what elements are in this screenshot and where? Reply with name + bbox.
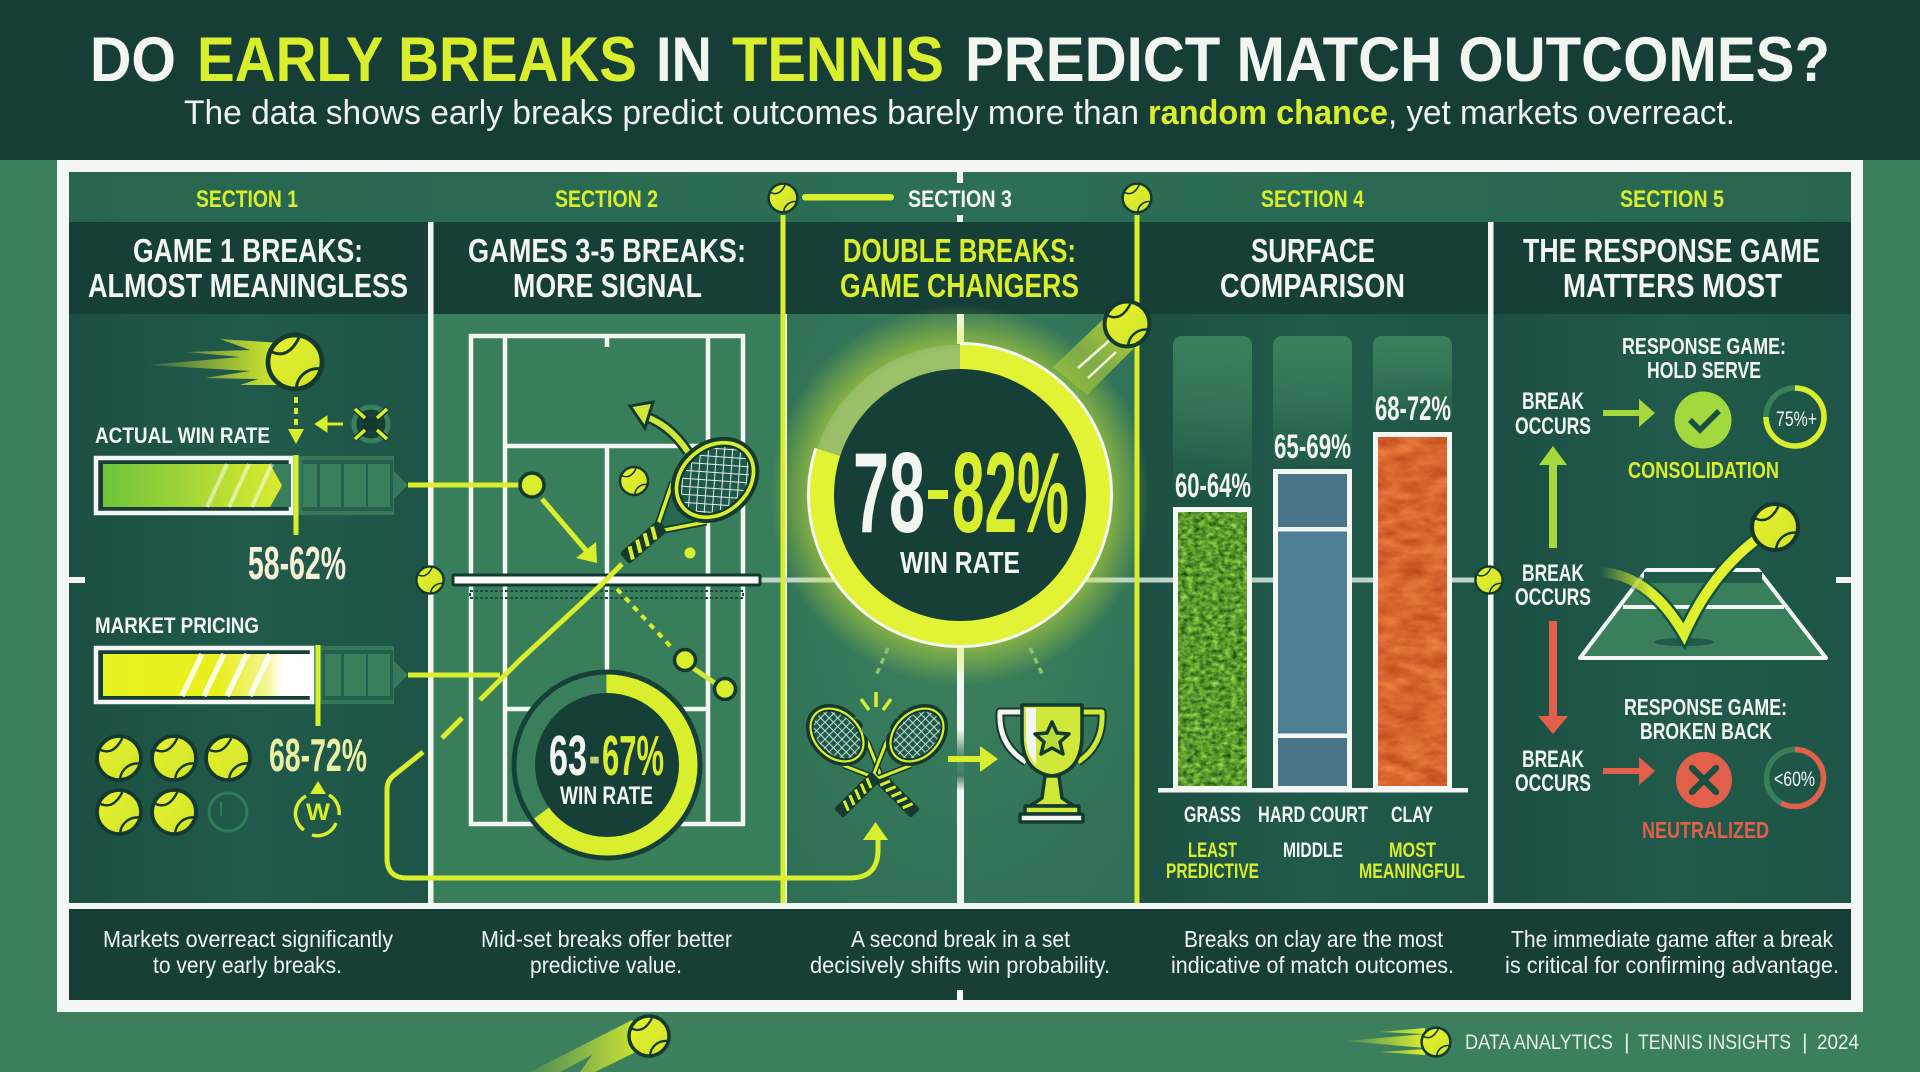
icon: racket — [600, 422, 774, 587]
icon: broken crossed rackets — [796, 692, 958, 831]
title: DO — [90, 25, 176, 95]
bar: actual win rate — [96, 455, 408, 535]
section labels: SECTION 5 — [1620, 186, 1724, 213]
label: break occurs bottom — [1515, 746, 1591, 797]
predictive labels: MEANINGFUL — [1359, 860, 1465, 883]
subtitle: The data shows early breaks predict outcomes barely more than — [184, 94, 1139, 132]
icon: footer ball — [1346, 1028, 1450, 1056]
label: break occurs top: BREAK — [1522, 388, 1584, 415]
label: broken back: RESPONSE GAME: — [1624, 694, 1787, 720]
dotted path — [617, 589, 736, 700]
bar values: 60-64% — [1175, 467, 1251, 505]
section headings: DOUBLE BREAKS: — [843, 233, 1076, 270]
section 3: double breaks — [770, 302, 1150, 831]
takeaway 1: to very early breaks. — [153, 952, 342, 978]
icon: flying ball — [1078, 302, 1149, 378]
takeaway 1 — [103, 926, 393, 978]
ball trail — [1053, 311, 1142, 395]
takeaway 5: is critical for confirming advantage. — [1505, 952, 1839, 978]
value: market pricing: 68-72% — [269, 729, 367, 781]
predictive labels: MOST — [1389, 839, 1436, 862]
takeaway 1: Markets overreact significantly — [103, 926, 393, 952]
section 2: games 3-5 breaks — [387, 336, 888, 878]
footer text: | — [1802, 1030, 1808, 1054]
icon: cross — [1676, 752, 1732, 808]
donut: 78-82% win rate: 78 — [853, 430, 925, 557]
section label strip — [69, 172, 1851, 222]
section 4: surface comparison — [1158, 336, 1468, 883]
bar values: 65-69% — [1274, 428, 1351, 466]
donut: 63-67% win rate: 63 — [549, 724, 587, 788]
divider ball: section 4-5 — [1475, 566, 1503, 594]
takeaway 3 — [810, 926, 1110, 978]
subtitle — [184, 94, 1735, 132]
ghost bar tracks — [1173, 336, 1452, 500]
takeaway 5: The immediate game after a break — [1511, 926, 1833, 952]
label: break occurs bottom: OCCURS — [1515, 770, 1591, 797]
title — [90, 25, 1830, 95]
bar: grass — [1176, 510, 1250, 789]
predictive labels: LEAST — [1188, 839, 1237, 862]
takeaway band — [69, 909, 1851, 1000]
section headings: THE RESPONSE GAME — [1523, 233, 1820, 270]
donut: 63-67% win rate: - — [589, 724, 600, 788]
arrowhead to rackets — [863, 822, 888, 840]
icon: crossed target — [354, 407, 388, 441]
section headings: MORE SIGNAL — [513, 268, 702, 305]
surface labels: CLAY — [1391, 802, 1433, 827]
predictive labels — [1166, 839, 1465, 883]
section 5: response game — [1515, 333, 1826, 843]
takeaway 2: Mid-set breaks offer better — [481, 926, 732, 952]
label: hold serve: HOLD SERVE — [1647, 357, 1761, 383]
label: broken back — [1624, 694, 1787, 744]
connector: actual to court — [408, 473, 597, 563]
icon: speeding ball — [147, 335, 322, 389]
icon: check — [1674, 392, 1732, 448]
donut: 78-82% win rate: WIN RATE — [900, 546, 1020, 580]
title: EARLY BREAKS — [197, 25, 637, 95]
ring: under 60%: <60% — [1774, 768, 1815, 791]
takeaway 4: Breaks on clay are the most — [1184, 926, 1444, 952]
section headings: SURFACE — [1251, 233, 1375, 270]
donut: 63-67% win rate: 67% — [602, 724, 664, 788]
bar values: 68-72% — [1375, 390, 1451, 428]
label: actual win rate: ACTUAL WIN RATE — [95, 423, 270, 448]
label: break occurs middle: BREAK — [1522, 560, 1584, 587]
predictive labels: PREDICTIVE — [1166, 860, 1259, 883]
net — [453, 575, 760, 598]
panel: section 1 background — [69, 314, 428, 903]
arrow to trophy — [948, 746, 998, 772]
icon: W badge: W — [306, 799, 330, 826]
section 1: game 1 breaks — [95, 335, 408, 836]
label: break occurs middle: OCCURS — [1515, 584, 1591, 611]
label: break occurs top — [1515, 388, 1591, 440]
donut: 78-82% win rate: 82% — [952, 430, 1069, 557]
tennis court — [471, 336, 743, 824]
label: break occurs middle — [1515, 560, 1591, 611]
arrow: down — [1538, 621, 1568, 734]
footer text: TENNIS INSIGHTS — [1638, 1030, 1791, 1054]
section headings: ALMOST MEANINGLESS — [88, 268, 408, 305]
section headings: GAME 1 BREAKS: — [133, 233, 363, 270]
section labels: SECTION 4 — [1261, 186, 1365, 213]
value: actual win rate: 58-62% — [248, 537, 346, 589]
donut: 63-67% win rate: WIN RATE — [560, 782, 653, 810]
takeaway 3: A second break in a set — [851, 926, 1071, 952]
panel: section 2 background — [433, 314, 783, 903]
label: neutralized: NEUTRALIZED — [1642, 817, 1769, 843]
heading band — [69, 222, 1851, 314]
yellow section 3 frame — [769, 184, 1151, 903]
takeaway 2 — [481, 926, 732, 978]
takeaway 4: indicative of match outcomes. — [1171, 952, 1454, 978]
takeaways — [103, 926, 1839, 978]
icon: small ball — [620, 467, 648, 495]
connector: market to section 3 — [387, 564, 878, 878]
title: PREDICT MATCH OUTCOMES? — [965, 25, 1830, 95]
section labels: SECTION 2 — [555, 186, 658, 213]
section labels: SECTION 3 — [908, 186, 1012, 213]
icon: trophy — [1000, 705, 1102, 822]
panel: section 4 background — [1139, 314, 1488, 903]
icon: W badge — [295, 781, 339, 836]
section headings: MATTERS MOST — [1563, 268, 1782, 305]
label: hold serve — [1622, 333, 1786, 383]
takeaway 3: decisively shifts win probability. — [810, 952, 1110, 978]
ring: 75%+: 75%+ — [1776, 408, 1817, 431]
arrow to marker — [317, 418, 343, 430]
glow — [770, 305, 1150, 685]
takeaway 4 — [1171, 926, 1454, 978]
ring: 75%+ — [1766, 388, 1824, 446]
predictive labels: MIDDLE — [1283, 839, 1343, 862]
title: IN — [656, 25, 712, 95]
white frame — [57, 160, 1863, 1012]
footer — [1346, 1028, 1859, 1056]
panel: section 5 background — [1493, 314, 1851, 903]
section headings — [88, 233, 1820, 305]
header band — [0, 0, 1920, 160]
label: hold serve: RESPONSE GAME: — [1622, 333, 1786, 359]
bar: hard court — [1276, 472, 1350, 788]
title: TENNIS — [732, 25, 944, 95]
dot — [684, 548, 696, 558]
dashed links — [875, 648, 1044, 678]
footer text — [1465, 1030, 1859, 1054]
arrow: to consolidation — [1603, 399, 1655, 427]
icon: ball count — [97, 736, 250, 834]
bar: market pricing — [96, 645, 408, 726]
section headings: COMPARISON — [1220, 268, 1405, 305]
label: break occurs top: OCCURS — [1515, 413, 1591, 440]
subtitle: , yet markets overreact. — [1388, 94, 1735, 132]
takeaway 5 — [1505, 926, 1839, 978]
surface labels: GRASS — [1184, 802, 1241, 827]
divider ball: section 1-2 — [416, 566, 444, 594]
arrow: up — [1539, 446, 1567, 548]
donut: 63-67% win rate — [514, 672, 700, 858]
ring: under 60% — [1766, 750, 1824, 806]
label: market pricing: MARKET PRICING — [95, 613, 259, 638]
donut: 78-82% win rate — [808, 344, 1112, 646]
baseline — [1158, 788, 1468, 792]
section labels — [196, 186, 1724, 213]
icon: bottom flying ball — [530, 1016, 669, 1072]
surface labels: HARD COURT — [1258, 802, 1368, 827]
section headings: GAME CHANGERS — [840, 268, 1079, 305]
label: broken back: BROKEN BACK — [1640, 718, 1772, 744]
icon: court with check swoosh — [1580, 504, 1826, 658]
arrow: to neutralized — [1603, 757, 1655, 785]
section labels: SECTION 1 — [196, 186, 298, 213]
footer text: 2024 — [1817, 1030, 1859, 1054]
bar values — [1175, 390, 1451, 505]
surface labels — [1184, 802, 1433, 827]
panel: section 3 background — [787, 314, 1137, 903]
swing arrow — [630, 402, 688, 452]
bar: clay — [1376, 434, 1450, 789]
section headings: GAMES 3-5 BREAKS: — [468, 233, 746, 270]
subtitle: random chance — [1148, 94, 1388, 132]
footer text: DATA ANALYTICS — [1465, 1030, 1613, 1054]
dashed drop arrow — [288, 397, 304, 444]
label: consolidation: CONSOLIDATION — [1628, 457, 1779, 483]
label: break occurs bottom: BREAK — [1522, 746, 1584, 773]
takeaway 2: predictive value. — [530, 952, 682, 978]
court centre lines — [69, 172, 1852, 1000]
footer text: | — [1624, 1030, 1630, 1054]
